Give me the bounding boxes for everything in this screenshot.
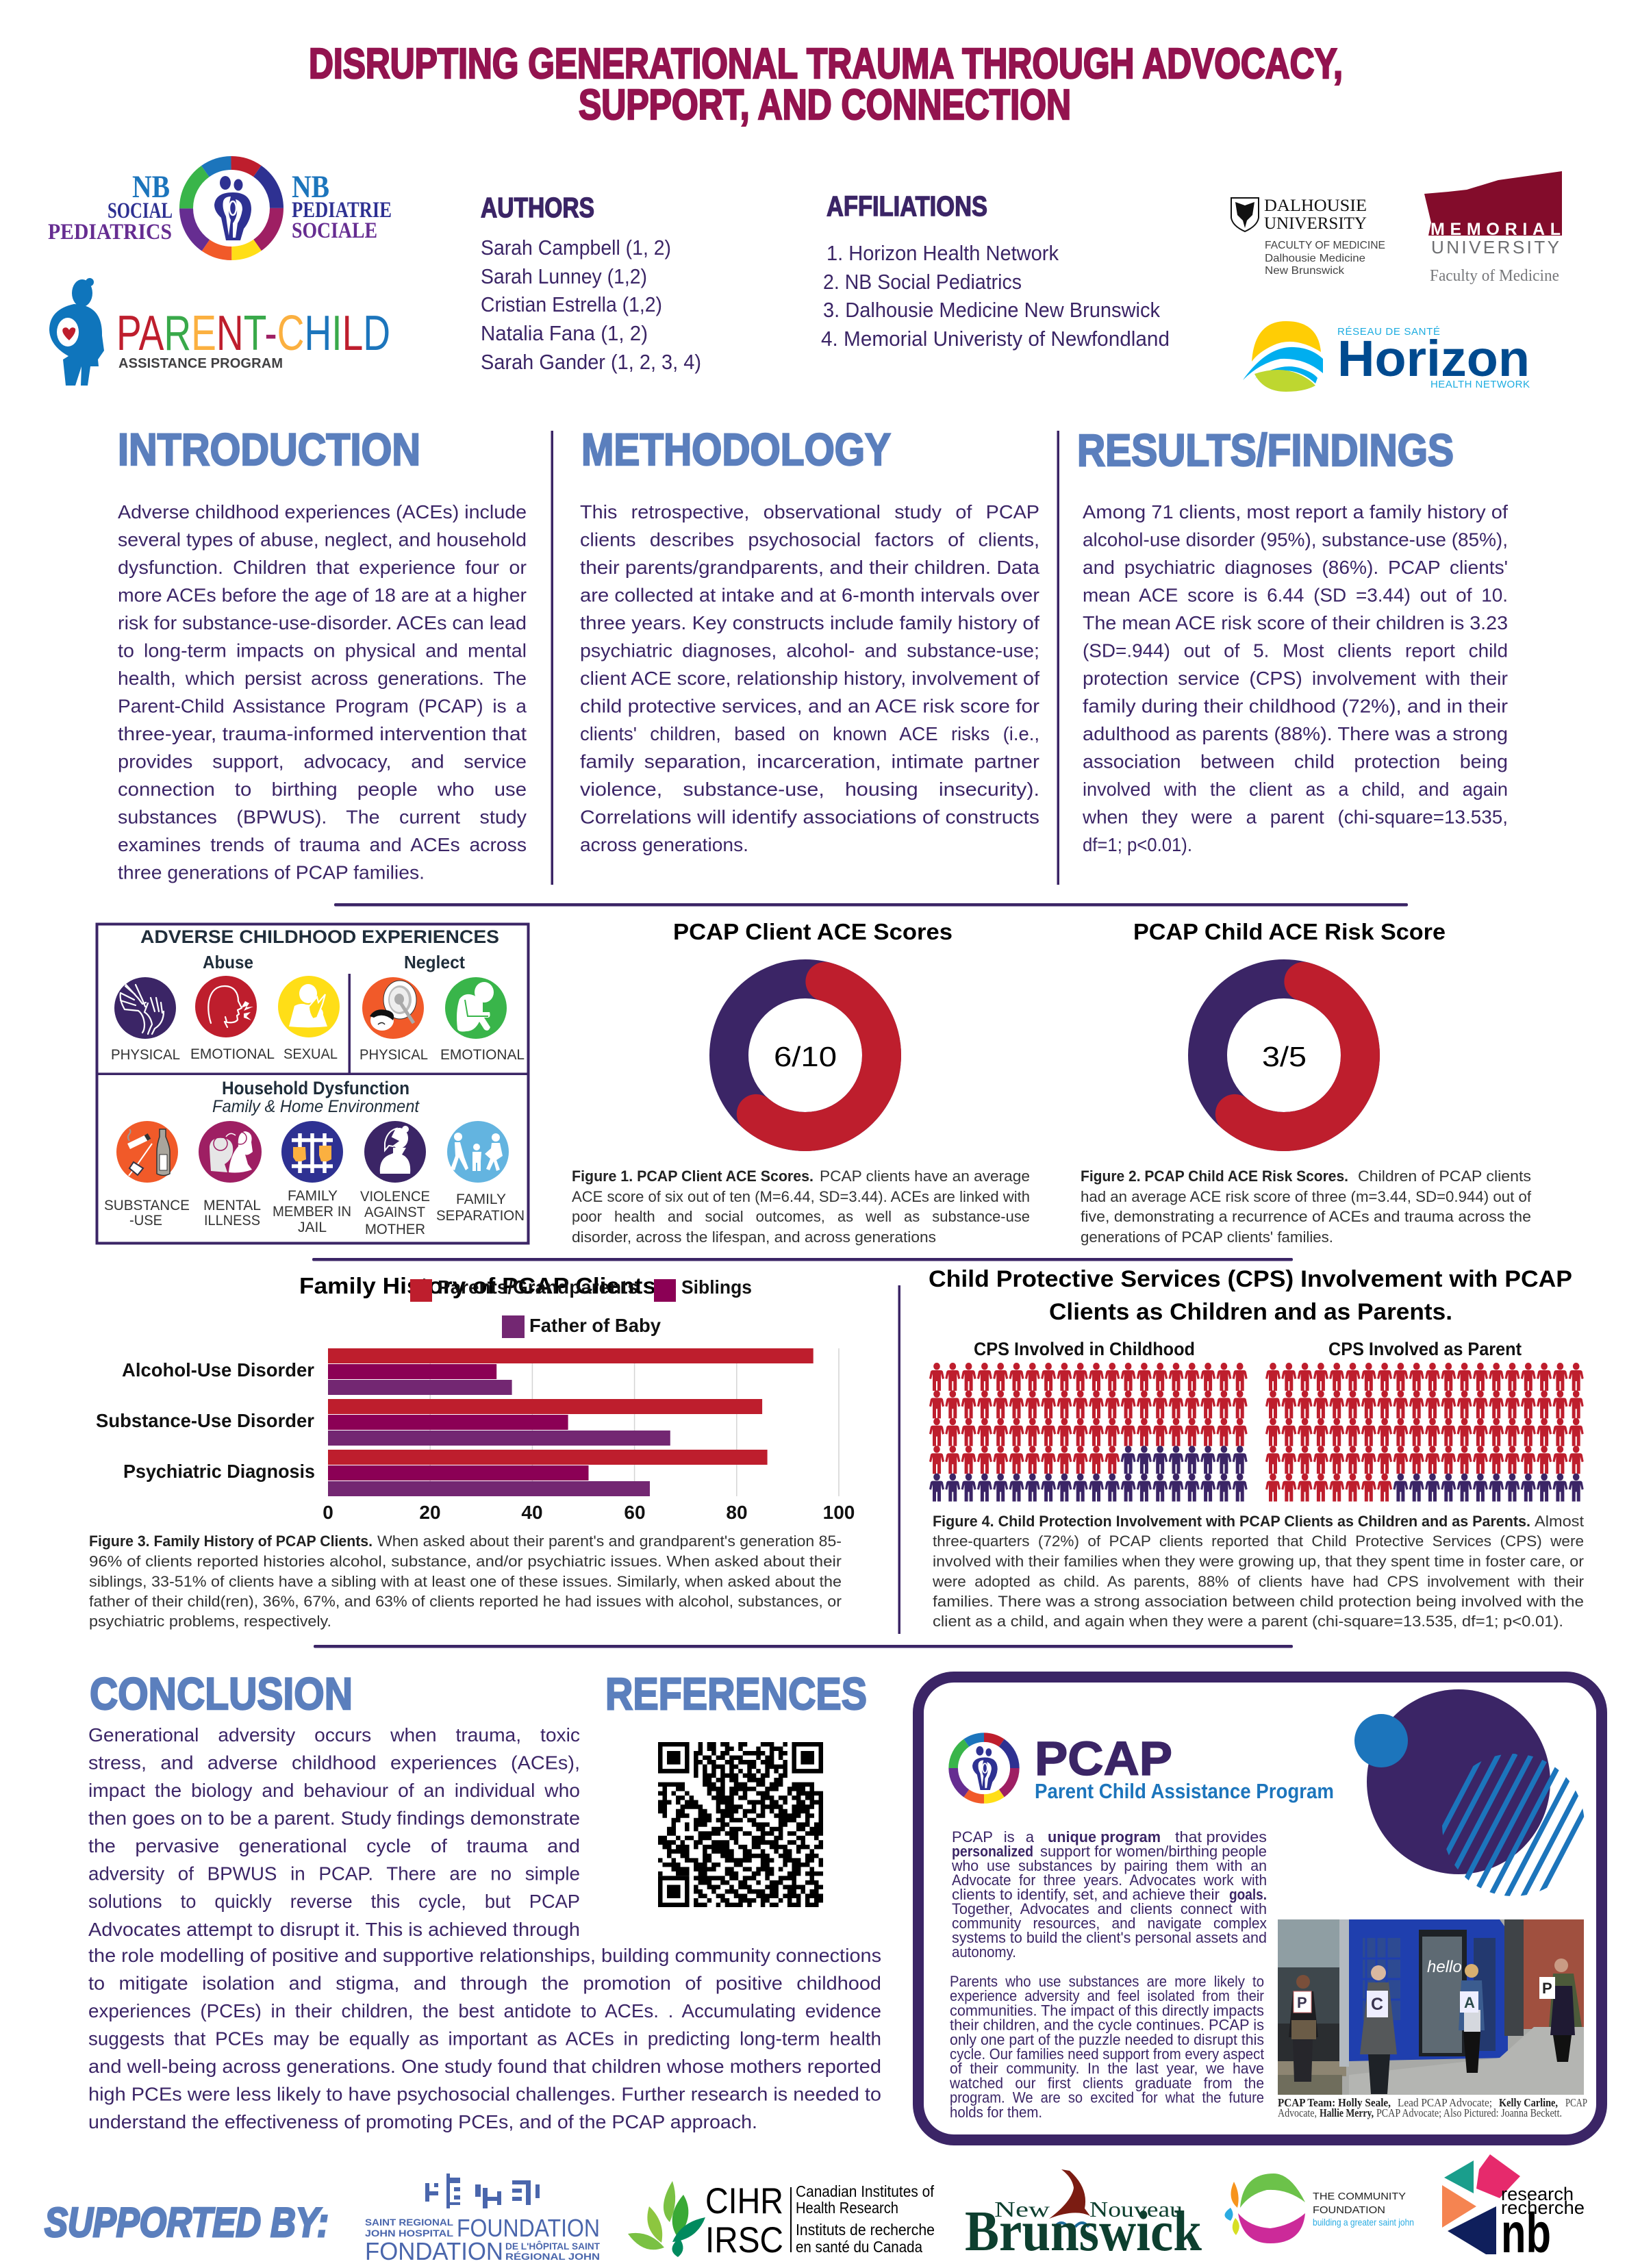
text block: introduction: connection to birthing people who use (118, 779, 527, 800)
donut chart: 6 of 10: 6/10 (774, 1041, 837, 1072)
logo: Horizon Health Network (1243, 321, 1530, 392)
person two (1360, 1965, 1397, 2094)
logotype: PARENT-CHILD (116, 306, 390, 361)
text block: about PCAP: experience adversity and feel isolated from their (950, 1987, 1264, 2004)
subheadings: CPS Involved in Childhood (974, 1339, 1195, 1359)
title (309, 40, 1343, 129)
caption: figure 2: Children of PCAP clients (1358, 1168, 1531, 1185)
text block: results: association between child protection being (1083, 751, 1508, 772)
icon: maple leaf (628, 2181, 705, 2257)
labels: household dysfunction types: FAMILY (456, 1192, 506, 1207)
text block: about PCAP: cycle. Our families need support from every aspect (950, 2045, 1264, 2063)
logo: Research NB: recherche (1501, 2197, 1585, 2218)
text block: about PCAP: Advocate for three years. Advocates work with (952, 1872, 1267, 1889)
text block: introduction: three-year, trauma-informed intervention that (118, 723, 527, 744)
axis tick labels: 0 (323, 1502, 333, 1523)
logo: New Brunswick (965, 2169, 1202, 2263)
icon: mental illness (199, 1121, 262, 1183)
legend (410, 1276, 752, 1338)
text block: results: adulthood as parents (88%). There was a strong (1083, 723, 1508, 744)
text block: about PCAP: only one part of the puzzle needed to disrupt this (950, 2031, 1264, 2048)
heading: ACE: ADVERSE CHILDHOOD EXPERIENCES (140, 927, 499, 947)
axis tick labels: 80 (726, 1502, 748, 1523)
logo: Saint John Regional Hospital Foundation: JOHN HOSPITAL (365, 2228, 454, 2239)
text block: conclusion: suggests that PCEs may be equally as important as ACEs in predicting long-term health (88, 2028, 881, 2049)
axis tick labels: 20 (419, 1502, 441, 1523)
text block: introduction: to long-term impacts on physical and mental (118, 640, 527, 662)
chart title: PCAP Client ACE Scores (673, 919, 953, 944)
text block: conclusion: then goes on to be a parent. Study findings demonstrate (88, 1808, 580, 1828)
text block: about PCAP: watched our first clients graduate from the (949, 2075, 1264, 2091)
text block: conclusion: to mitigate isolation and stigma, and through the promotion of positive childhood (88, 1972, 881, 1994)
panel: conclusion (88, 1668, 881, 2132)
logo: Saint John Regional Hospital Foundation (365, 2174, 600, 2265)
labels: abuse and neglect types: PHYSICAL (360, 1047, 428, 1063)
labels: household dysfunction types: JAIL (298, 1220, 327, 1235)
person four (1539, 1958, 1582, 2062)
text block: conclusion: impact the biology and behaviour of an individual who (88, 1780, 580, 1801)
bar chart (328, 1348, 839, 1496)
text block: about PCAP: program. We are so excited for what the future (950, 2089, 1264, 2106)
text block: conclusion: high PCEs were less likely to have psychosocial challenges. Further research is needed to (88, 2083, 881, 2105)
affiliations: 1. Horizon Health Network (827, 241, 1059, 265)
logo: Dalhousie University: New Brunswick (1265, 265, 1345, 277)
text block: results: and psychiatric diagnoses (86%). PCAP clients' (1083, 557, 1508, 578)
heading: methodology: METHODOLOGY (581, 424, 891, 475)
text block: introduction: substances (BPWUS). The current study (118, 807, 527, 827)
text block: about PCAP: communities. The impact of this directly impacts (950, 2002, 1264, 2019)
labels: household dysfunction types: MOTHER (365, 1222, 425, 1237)
text block: about PCAP: clients to identify, set, and achieve their (952, 1886, 1220, 1903)
text block: results: df=1; p<0.01). (1083, 834, 1192, 855)
text block: about PCAP: who use substances by pairing them with an (951, 1857, 1267, 1874)
panel: adverse childhood experiences (97, 924, 529, 1244)
QR code (658, 1742, 823, 1907)
text block: conclusion: solutions to quickly reverse this cycle, but PCAP (88, 1891, 580, 1912)
caption: photo: PCAP Advocate; Also Pictured: Joanna Beckett. (1376, 2106, 1562, 2119)
logo: NB Social Pediatrics (48, 163, 392, 253)
panel: PCAP client ACE scores (572, 919, 1030, 1246)
authors: AUTHORS (481, 192, 594, 223)
text block: introduction: health, which persist across generations. The (118, 668, 527, 689)
text block: results: when they were a parent (chi-square=13.535, (1082, 807, 1508, 827)
text block: methodology: family separation, incarceration, intimate partner (580, 751, 1039, 772)
text block: methodology: their parents/grandparents, and their children. Data (580, 557, 1039, 578)
caption: figure 2: Figure 2. PCAP Child ACE Risk Scores. (1081, 1168, 1348, 1185)
logo: NB Social Pediatrics: PEDIATRICS (48, 220, 172, 244)
labels: household dysfunction types: AGAINST (364, 1205, 425, 1220)
logo: Horizon Health Network: Horizon (1337, 330, 1530, 387)
subheadings: abuse and neglect: Abuse (203, 952, 253, 972)
icon: sexual abuse (278, 976, 340, 1037)
caption: figure 2: five, demonstrating a recurrence of ACEs and trauma across the (1081, 1208, 1531, 1225)
caption: figure 3: When asked about their parent's and grandparent's generation 85- (377, 1533, 842, 1550)
logo: CIHR IRSC (628, 2181, 935, 2260)
text block: results: (SD=.944) out of 5. Most clients report child (1083, 640, 1508, 662)
logo: Memorial University: MEMORIAL (1430, 220, 1561, 239)
text block: conclusion: stress, and adverse childhood experiences (ACEs), (88, 1752, 580, 1774)
authors: Sarah Campbell (1, 2) (481, 236, 671, 260)
text block: conclusion: Advocates attempt to disrupt it. This is achieved through (88, 1919, 580, 1940)
text block: conclusion: Generational adversity occurs when trauma, toxic (88, 1724, 580, 1746)
icon: violence against mother (364, 1121, 426, 1183)
caption: figure 4: three-quarters (72%) of PCAP clients reported that Child Protective Services (CPS) were (933, 1533, 1584, 1550)
photo: PCAP team holding letters: hello (1427, 1958, 1462, 1976)
panel: results and findings (1077, 425, 1508, 855)
text block: results: protection service (CPS) involvement with their (1083, 668, 1508, 689)
text block: introduction: Adverse childhood experiences (ACEs) include (118, 501, 527, 522)
pictogram: CPS involved as parent (1265, 1363, 1584, 1502)
logo: Dalhousie University: FACULTY OF MEDICINE (1265, 240, 1385, 251)
icon: sail (1049, 2169, 1090, 2219)
caption: figure 3: 96% of clients reported histories alcohol, substance, and/or psychiatric issues. When asked about their (89, 1553, 842, 1570)
subheadings (974, 1339, 1522, 1359)
icon: emotional neglect (445, 977, 507, 1039)
legend: Parents/Grandparents (438, 1276, 638, 1298)
text block: introduction: three generations of PCAP families. (118, 861, 425, 883)
labels: abuse and neglect types: PHYSICAL (111, 1047, 180, 1063)
labels: household dysfunction types (104, 1188, 525, 1237)
affiliations (821, 190, 1170, 351)
caption: figure 3: father of their child(ren), 36%, 67%, and 63% of clients reported he had issues with alcohol, substances, or (89, 1593, 842, 1610)
logo: Memorial University (1424, 171, 1562, 285)
logo: New Brunswick: New (994, 2197, 1050, 2221)
icon: shield (1231, 198, 1259, 231)
subheading: household dysfunction (212, 1078, 420, 1116)
caption: figure 4: families. There was a strong association between child protection being involved with the (933, 1593, 1584, 1610)
labels: household dysfunction types: SEPARATION (436, 1208, 525, 1224)
text block: conclusion: the pervasive generational cycle of trauma and (88, 1835, 580, 1856)
person three: A (1464, 1994, 1475, 2011)
caption: figure 4: Almost (1535, 1513, 1584, 1530)
text block: results: involved with the client as a child, and again (1083, 779, 1508, 800)
logo: CIHR IRSC: en santé du Canada (796, 2238, 922, 2256)
logo: CIHR IRSC: Canadian Institutes of (796, 2182, 935, 2200)
icon: mother figure (49, 278, 104, 386)
category labels (96, 1359, 315, 1482)
affiliations: 3. Dalhousie Medicine New Brunswick (823, 298, 1160, 322)
logo: Saint John Regional Hospital Foundation: RÉGIONAL JOHN (505, 2251, 600, 2262)
chart title (929, 1266, 1572, 1325)
text block: about PCAP: goals. (1229, 1886, 1267, 1903)
logo: Saint John Regional Hospital Foundation: SAINT REGIONAL (365, 2217, 453, 2228)
caption: figure 3: siblings, 33-51% of clients have a sibling with at least one of these issues. Similarly, when asked about the (89, 1573, 842, 1590)
heading: references: REFERENCES (605, 1668, 867, 1719)
heading: results: RESULTS/FINDINGS (1077, 425, 1454, 475)
text block: results: alcohol-use disorder (95%), substance-use (85%), (1083, 529, 1508, 551)
text block: methodology: clients' children, based on known ACE risks (i.e., (580, 723, 1039, 744)
authors: Sarah Gander (1, 2, 3, 4) (481, 350, 701, 374)
chart title: Family History of PCAP Clients (299, 1273, 656, 1298)
caption: photo: Lead PCAP Advocate; (1398, 2096, 1492, 2109)
labels: household dysfunction types: SUBSTANCE (104, 1198, 190, 1213)
logo: Saint John Regional Hospital Foundation: FONDATION (365, 2237, 503, 2265)
caption: figure 2 (1081, 1168, 1532, 1246)
axis tick labels: 100 (823, 1502, 855, 1523)
heading: conclusion: CONCLUSION (90, 1668, 353, 1719)
logo: Horizon Health Network: RÉSEAU DE SANTÉ (1337, 326, 1440, 338)
logo: PCAP: Parent Child Assistance Program (1035, 1779, 1334, 1803)
logo: Horizon Health Network: HEALTH NETWORK (1430, 379, 1530, 390)
text block: introduction: risk for substance-use-disorder. ACEs can lead (118, 612, 527, 633)
authors: Cristian Estrella (1,2) (481, 292, 662, 316)
labels: abuse and neglect types (111, 1046, 525, 1063)
panel: introduction (118, 424, 527, 883)
logo: NB Social Pediatrics: NB (132, 169, 170, 205)
axis tick labels: 60 (624, 1502, 646, 1523)
logo: Dalhousie University: UNIVERSITY (1264, 214, 1367, 233)
caption: photo: Kelly Carline, (1499, 2096, 1558, 2109)
photo: PCAP team holding letters (1278, 1919, 1584, 2095)
caption: figure 4: client as a child, and again when they were a parent (chi-square=13.535, df=1; p<0.01). (933, 1613, 1563, 1630)
logo: Memorial University: Faculty of Medicine (1430, 267, 1559, 285)
text block: introduction (118, 501, 527, 883)
text block: about PCAP: Together, Advocates and clients connect with (952, 1900, 1267, 1917)
text block: about PCAP: of their community. In the last year, we have (950, 2060, 1264, 2077)
category labels: Psychiatric Diagnosis (123, 1461, 315, 1482)
text block: conclusion: and well-being across generations. One study found that children whose mothers reported (88, 2056, 881, 2077)
labels: household dysfunction types: FAMILY (288, 1188, 338, 1204)
logo: Parent-Child Assistance Program: ASSISTANCE PROGRAM (118, 356, 283, 371)
subheadings: abuse and neglect: Neglect (404, 952, 465, 972)
legend: Siblings (681, 1276, 752, 1298)
subheading: household dysfunction: Household Dysfunction (222, 1078, 409, 1098)
icon: physical abuse (114, 977, 176, 1039)
caption: figure 1: Figure 1. PCAP Client ACE Scores. (572, 1168, 814, 1185)
text block: introduction: examines trends of trauma and ACEs across (118, 834, 527, 855)
caption: figure 1: PCAP clients have an average (820, 1168, 1030, 1185)
heading: supported by: SUPPORTED BY: (45, 2200, 329, 2245)
person two: C (1371, 1995, 1383, 2014)
icon: physical neglect (362, 977, 424, 1039)
text block: methodology: This retrospective, observational study of PCAP (580, 501, 1039, 522)
subheading: household dysfunction: Family & Home Environment (212, 1097, 420, 1116)
logo: CIHR IRSC: CIHR (705, 2181, 783, 2221)
text block: about PCAP: unique program (1048, 1828, 1161, 1845)
text block: methodology: clients describes psychosocial factors of clients, (580, 529, 1039, 551)
text block: introduction: more ACEs before the age of 18 are at a higher (118, 585, 527, 605)
logo: Memorial University: UNIVERSITY (1431, 237, 1559, 257)
caption: figure 1: disorder, across the lifespan, and across generations (572, 1228, 936, 1246)
text block: results: family during their childhood (72%), and in their (1083, 696, 1508, 716)
labels: household dysfunction types: ILLNESS (204, 1213, 260, 1228)
icon: substance use (116, 1121, 178, 1183)
logo: The Community Foundation (1224, 2174, 1414, 2243)
icon: family separation (447, 1121, 509, 1183)
caption: figure 3 (89, 1533, 842, 1630)
affiliations: 4. Memorial Univeristy of Newfondland (821, 327, 1170, 351)
heading: introduction: INTRODUCTION (118, 424, 420, 475)
text block: methodology: across generations. (580, 834, 748, 855)
caption: figure 2: generations of PCAP clients' families. (1081, 1228, 1333, 1246)
category labels: Alcohol-Use Disorder (122, 1359, 314, 1381)
text block: methodology: client ACE score, relationship history, involvement of (580, 668, 1039, 689)
text block: results: The mean ACE risk score of their children is 3.23 (1083, 612, 1508, 633)
caption: photo (1278, 2096, 1587, 2119)
title: DISRUPTING GENERATIONAL TRAUMA THROUGH ADVOCACY, (309, 40, 1343, 88)
subheadings: CPS Involved as Parent (1328, 1339, 1522, 1359)
text block: about PCAP: autonomy. (952, 1943, 1016, 1961)
labels: household dysfunction types: VIOLENCE (360, 1189, 430, 1205)
logo: PCAP (953, 1732, 1334, 1803)
chart title: Child Protective Services (CPS) Involvement with PCAP (929, 1266, 1572, 1292)
authors: Natalia Fana (1, 2) (481, 321, 648, 345)
text block: about PCAP: holds for them. (950, 2104, 1042, 2121)
logo: Dalhousie University: DALHOUSIE (1264, 197, 1367, 215)
caption: figure 3: psychiatric problems, respectively. (89, 1613, 331, 1630)
logo: CIHR IRSC: IRSC (705, 2220, 783, 2260)
caption: photo: Hallie Merry, (1320, 2106, 1374, 2119)
labels: abuse and neglect types: EMOTIONAL (440, 1047, 525, 1063)
logo: Saint John Regional Hospital Foundation: FOUNDATION (457, 2214, 600, 2242)
text block: methodology: psychiatric diagnoses, alcohol- and substance-use; (580, 640, 1039, 662)
person one (1289, 1975, 1318, 2082)
person one: P (1297, 1994, 1307, 2011)
text block: about PCAP: their children, and the cycle continues. PCAP is (950, 2016, 1264, 2034)
affiliations: AFFILIATIONS (827, 190, 987, 222)
text block: results: mean ACE score is 6.44 (SD =3.44) out of 10. (1083, 585, 1508, 605)
pictogram: CPS involved in childhood (929, 1363, 1248, 1502)
logo: Research NB (1442, 2154, 1585, 2265)
text block: methodology: violence, substance-use, housing insecurity). (580, 779, 1039, 800)
text block: methodology: Correlations will identify associations of constructs (580, 807, 1039, 827)
category labels: Substance-Use Disorder (96, 1410, 314, 1431)
donut chart: 6 of 10 (729, 979, 882, 1131)
text block: methodology (580, 501, 1039, 855)
subheadings: abuse and neglect (203, 952, 465, 972)
logo: Dalhousie University: Dalhousie Medicine (1265, 253, 1365, 264)
logo: The Community Foundation: THE COMMUNITY (1313, 2191, 1406, 2202)
text block: conclusion (88, 1724, 881, 2132)
donut chart: 3 of 5: 3/5 (1262, 1041, 1307, 1072)
logo: CIHR IRSC: Health Research (796, 2199, 898, 2217)
chart title: Clients as Children and as Parents. (1049, 1299, 1452, 1325)
caption: figure 4 (932, 1513, 1584, 1630)
donut chart: 3 of 5 (1208, 979, 1360, 1131)
panel: family history bar chart (89, 1273, 855, 1630)
affiliations: 2. NB Social Pediatrics (823, 270, 1022, 294)
person three (1459, 1964, 1485, 2073)
text block: about PCAP: that provides (1175, 1828, 1267, 1845)
caption: figure 2: had an average ACE risk score of three (m=3.44, SD=0.944) out of (1081, 1188, 1532, 1205)
text block: methodology: three years. Key constructs include family history of (580, 612, 1039, 633)
text block: results (1082, 501, 1508, 855)
title: SUPPORT, AND CONNECTION (579, 81, 1071, 129)
panel: PCAP program (918, 1677, 1614, 2140)
logo: NB Social Pediatrics: SOCIALE (292, 218, 377, 243)
caption: figure 4: Figure 4. Child Protection Involvement with PCAP Clients as Children and as Parents. (933, 1513, 1530, 1530)
text block: methodology: are collected at intake and at 6-month intervals over (580, 585, 1039, 605)
text block: about PCAP: systems to build the client's personal assets and (952, 1929, 1267, 1946)
logo: Saint John Regional Hospital Foundation: DE L'HÔPITAL SAINT (505, 2240, 600, 2252)
text block: conclusion: understand the effectiveness of promoting PCEs, and of the PCAP approach. (88, 2111, 757, 2132)
panel: methodology (580, 424, 1039, 855)
text block: introduction: dysfunction. Children that experience four or (118, 557, 527, 578)
text block: results: Among 71 clients, most report a family history of (1083, 501, 1508, 522)
logo: NB Social Pediatrics: PEDIATRIE (292, 198, 392, 223)
text block: about PCAP: support for women/birthing people (1040, 1843, 1267, 1860)
logo: Research NB: nb (1501, 2202, 1551, 2265)
text block: conclusion: the role modelling of positive and supportive relationships, building community connections (88, 1945, 881, 1966)
chart title: PCAP Child ACE Risk Score (1133, 919, 1446, 944)
logo: The Community Foundation: building a greater saint john (1313, 2217, 1414, 2228)
authors: Sarah Lunney (1,2) (481, 264, 647, 288)
text block: about PCAP: PCAP is a (952, 1828, 1035, 1845)
caption: figure 1: ACE score of six out of ten (M=6.44, SD=3.44). ACEs are linked with (572, 1188, 1030, 1205)
labels: household dysfunction types: MENTAL (203, 1198, 261, 1213)
text block: about PCAP: personalized (952, 1843, 1033, 1860)
text block: conclusion: experiences (PCEs) in their children, the best antidote to ACEs. . Accumulating evidence (88, 2000, 881, 2021)
text block: methodology: child protective services, and an ACE risk score for (580, 696, 1039, 716)
person four: P (1542, 1980, 1552, 1997)
caption: figure 1 (572, 1168, 1030, 1246)
logo: Research NB: research (1501, 2184, 1574, 2204)
logo: CIHR IRSC: Instituts de recherche (796, 2221, 935, 2239)
caption: figure 4: were adopted as child. As parents, 88% of clients have had CPS involvement with their (932, 1573, 1584, 1590)
logo: Parent-Child Assistance Program (49, 278, 390, 386)
caption: figure 3: Figure 3. Family History of PCAP Clients. (89, 1533, 373, 1550)
labels: household dysfunction types: MEMBER IN (273, 1204, 351, 1220)
text block: introduction: Parent-Child Assistance Program (PCAP) is a (118, 696, 527, 716)
labels: abuse and neglect types: EMOTIONAL (190, 1046, 275, 1062)
logo: NB Social Pediatrics: NB (292, 169, 329, 205)
panel: references (605, 1668, 867, 1907)
caption: photo: PCAP Team: Holly Seale, (1278, 2096, 1391, 2109)
logo: New Brunswick: Brunswick (965, 2200, 1202, 2263)
text block: about PCAP (949, 1828, 1267, 2121)
axis tick labels (323, 1502, 855, 1523)
logo: PCAP: PCAP (1035, 1732, 1172, 1785)
logo: NB Social Pediatrics: SOCIAL (108, 199, 173, 223)
logo: Dalhousie University (1231, 197, 1385, 277)
caption: photo: Advocate, (1278, 2106, 1317, 2119)
graphic: decorative circles (1354, 1689, 1585, 1896)
panel: child protective services (929, 1266, 1584, 1630)
logo: The Community Foundation: FOUNDATION (1313, 2204, 1385, 2216)
text block: introduction: provides support, advocacy, and service (118, 751, 527, 772)
text block: about PCAP: community resources, and navigate complex (952, 1915, 1267, 1932)
caption: figure 4: involved with their families when they were growing up, that they spent time in foster care, or (933, 1553, 1584, 1570)
text block: introduction: several types of abuse, neglect, and household (118, 529, 527, 551)
axis tick labels: 40 (521, 1502, 543, 1523)
text block: about PCAP: Parents who use substances are more likely to (950, 1973, 1264, 1990)
text block: conclusion: adversity of BPWUS in PCAP. There are no simple (88, 1863, 580, 1885)
labels: abuse and neglect types: SEXUAL (283, 1046, 338, 1062)
panel: PCAP child ACE risk score (1081, 919, 1532, 1246)
caption: photo: PCAP (1565, 2096, 1587, 2109)
legend: Father of Baby (529, 1315, 661, 1336)
labels: household dysfunction types: -USE (129, 1213, 162, 1228)
icon: family member in jail (281, 1121, 343, 1183)
authors (481, 192, 701, 374)
caption: figure 1: poor health and social outcomes, as well as substance-use (572, 1208, 1030, 1225)
logo: New Brunswick: Nouveau (1089, 2197, 1183, 2221)
icon: emotional abuse (195, 976, 257, 1037)
